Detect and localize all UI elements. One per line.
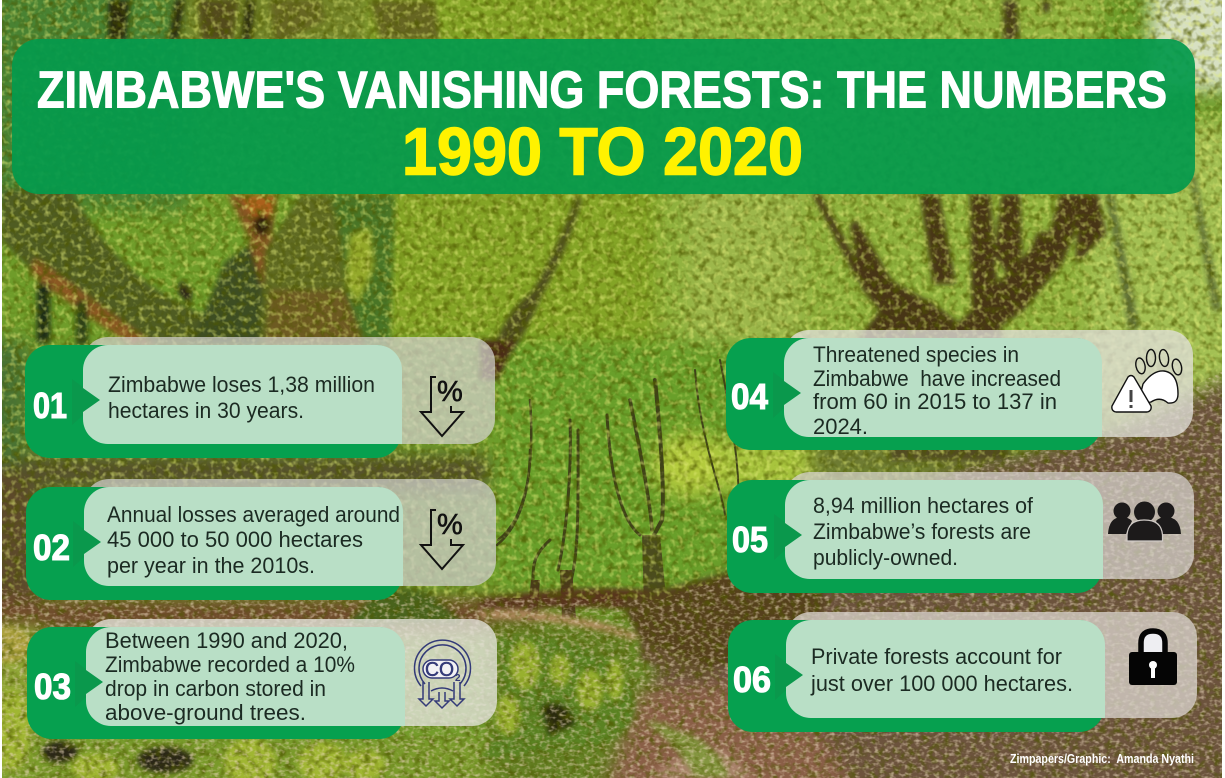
card text: Zimbabwe have increased	[813, 366, 1061, 391]
title banner	[12, 39, 1195, 194]
big mossy tree limbs and trunk	[2, 190, 260, 345]
icon: CO2 with down arrows: CO	[425, 659, 454, 681]
card text: from 60 in 2015 to 137 in	[813, 389, 1057, 414]
card 02	[26, 479, 496, 600]
number: 03	[34, 666, 71, 707]
card text: 8,94 million hectares of	[813, 493, 1034, 518]
card 01	[25, 337, 495, 458]
card text: per year in the 2010s.	[107, 553, 315, 578]
thin trees	[497, 360, 738, 595]
card 06	[728, 612, 1197, 732]
icon: padlock	[1129, 631, 1177, 685]
card 03	[27, 619, 497, 739]
number: 02	[33, 527, 70, 568]
card text: 45 000 to 50 000 hectares	[107, 527, 363, 552]
card text: Private forests account for	[811, 644, 1062, 669]
number: 05	[732, 519, 768, 560]
card text: Zimbabwe loses 1,38 million	[108, 372, 375, 397]
card text: hectares in 30 years.	[108, 398, 304, 423]
card text: drop in carbon stored in	[105, 676, 326, 701]
card text: Zimbabwe’s forests are	[813, 519, 1031, 544]
number: 04	[731, 376, 768, 417]
card text: publicly-owned.	[813, 545, 958, 570]
centre branch from big tree	[492, 197, 582, 353]
number: 01	[33, 385, 67, 426]
icon: paw with warning triangle	[1112, 349, 1183, 412]
icon: CO2 with down arrows: 2	[455, 673, 461, 684]
title line 2: 1990 TO 2020	[402, 114, 803, 190]
icon: CO2 with down arrows	[415, 640, 471, 708]
card text: Annual losses averaged around	[107, 502, 400, 527]
card text: Zimbabwe recorded a 10%	[105, 652, 355, 677]
card text: just over 100 000 hectares.	[810, 671, 1073, 696]
card text: 2024.	[813, 414, 868, 439]
upper right trunks	[1003, 0, 1050, 40]
icon: percent down arrow: %	[437, 509, 463, 541]
card text: Threatened species in	[813, 342, 1019, 367]
ground and moss	[480, 588, 650, 612]
icon: people group	[1108, 502, 1181, 541]
card text: above-ground trees.	[105, 700, 306, 725]
card 04	[726, 330, 1193, 450]
upper left trunks	[108, 0, 255, 40]
icon: percent down arrow: %	[437, 376, 463, 408]
card 05	[727, 472, 1194, 593]
icon: percent down arrow	[421, 376, 463, 436]
icon: percent down arrow	[421, 509, 463, 569]
number: 06	[733, 659, 771, 700]
card text: Between 1990 and 2020,	[105, 628, 348, 653]
